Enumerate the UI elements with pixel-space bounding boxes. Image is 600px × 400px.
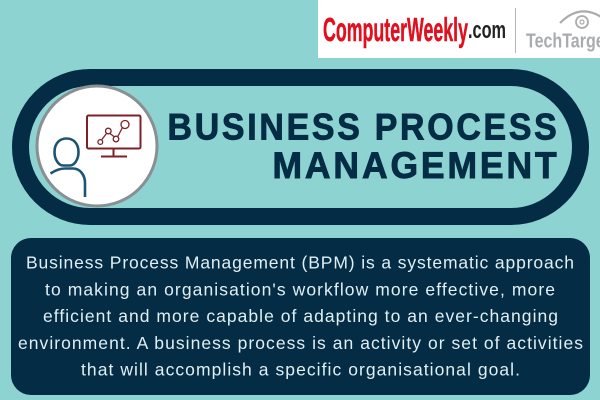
icon: person outline xyxy=(50,138,85,197)
definition text: efficient and more capable of adapting to an ever-changing xyxy=(43,306,558,326)
definition text xyxy=(18,252,583,380)
title xyxy=(168,106,560,186)
panel: definition xyxy=(11,238,590,395)
title: MANAGEMENT xyxy=(272,145,560,186)
definition text: Business Process Management (BPM) is a systematic approach xyxy=(26,252,574,272)
logo banner: .com xyxy=(468,17,506,44)
logo banner: ComputerWeekly xyxy=(323,11,468,48)
title: BUSINESS PROCESS xyxy=(168,106,560,148)
definition text: environment. A business process is an activity or set of activities xyxy=(18,333,583,353)
title pill frame xyxy=(20,78,580,216)
definition text: to making an organisation's workflow more effective, more xyxy=(45,280,555,300)
definition text: that will accomplish a specific organisational goal. xyxy=(81,360,520,380)
logo banner xyxy=(318,0,600,58)
icon: monitor with line chart xyxy=(87,116,140,156)
icon circle: presenter and chart xyxy=(37,86,157,206)
